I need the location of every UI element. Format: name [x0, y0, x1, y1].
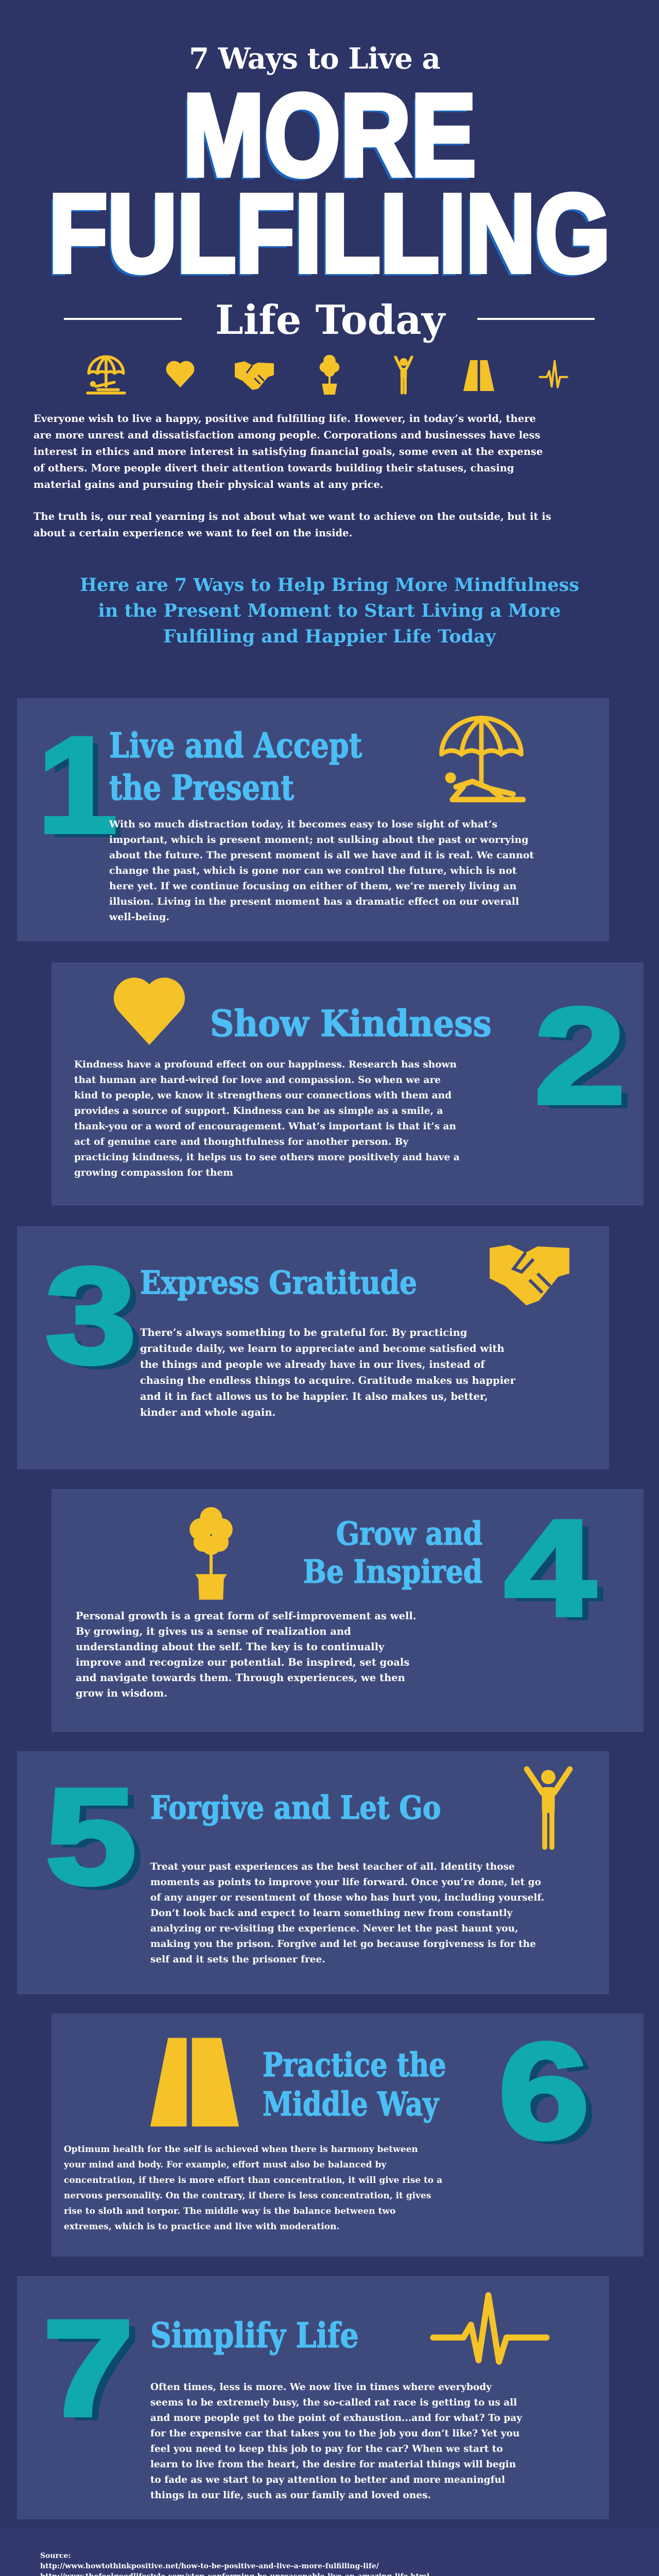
body text: With so much distraction today, it becomes easy to lose sight of what’s — [109, 819, 497, 830]
body text: understanding about the self. The key is to continually — [76, 1641, 384, 1653]
number 4: 4 — [505, 1492, 596, 1645]
body text: moments as points to improve your life forward. Once you’re done, let go — [150, 1877, 541, 1888]
number 1: 1 — [38, 709, 117, 861]
title: Life Today with lines: Life Today — [215, 297, 445, 344]
icon: umbrella — [86, 355, 126, 395]
intro text: of others. More people divert their attention towards building their statuses, chasing — [33, 462, 514, 474]
body text: There’s always something to be grateful for. By practicing — [140, 1327, 467, 1338]
heading: Be Inspired — [303, 1553, 482, 1590]
body text: kinder and whole again. — [140, 1406, 275, 1418]
panel: 2 Show Kindness — [51, 962, 644, 1206]
body text — [150, 1861, 544, 1965]
body text: Optimum health for the self is achieved when there is harmony between — [64, 2144, 418, 2155]
body text: here yet. If we continue focusing on either of them, we’re merely living an — [109, 880, 516, 892]
body text — [64, 2144, 442, 2232]
body text: illusion. Living in the present moment has a dramatic effect on our overall — [109, 896, 519, 907]
body text: grow in wisdom. — [76, 1687, 167, 1699]
body text: By growing, it gives us a sense of realization and — [76, 1625, 351, 1637]
body text: rise to sloth and torpor. The middle way is the balance between two — [64, 2206, 395, 2216]
icon: tree — [189, 1507, 233, 1600]
body text: seems to be extremely busy, the so-called rat race is getting to us all — [150, 2397, 517, 2408]
panel: 7 Simplify Life — [17, 2276, 609, 2519]
body text: that human are hard-wired for love and compassion. So when we are — [74, 1075, 441, 1086]
body text: things in our life, such as our family and loved ones. — [150, 2490, 431, 2501]
body text — [76, 1610, 417, 1699]
panel: 3 Express Gratitude — [17, 1226, 609, 1469]
body text: concentration, if there is more effort than concentration, it will give rise to a — [64, 2175, 442, 2185]
body text: for the expensive car that takes you to the job you don’t like? Yet you — [150, 2428, 519, 2439]
icon: pulse — [430, 2292, 550, 2365]
body text: act of genuine care and thoughtfulness for another person. By — [74, 1137, 408, 1147]
intro text — [33, 413, 543, 490]
number 5: 5 — [45, 1760, 136, 1913]
body text — [109, 819, 534, 923]
body text: self and it sets the prisoner free. — [150, 1954, 325, 1965]
body text: and it in fact allows us to be happier. It also makes us, better, — [140, 1391, 488, 1402]
body text: Don’t look back and expect to learn something new from constantly — [150, 1908, 512, 1919]
heading: Practice the — [263, 2046, 446, 2084]
icon: handshake — [490, 1245, 569, 1306]
heading — [109, 725, 362, 808]
heading — [303, 1515, 482, 1590]
panel: 4 Grow and Be Inspired — [51, 1489, 644, 1732]
intro text: material gains and pursuing their physical wants at any price. — [33, 479, 384, 490]
heading: Express Gratitude — [140, 1264, 417, 1301]
body text: the things and people we already have in our lives, instead of — [140, 1359, 485, 1370]
body text: improve and recognize our potential. Be inspired, set goals — [76, 1656, 409, 1668]
icon row — [86, 354, 568, 395]
body text: analyzing or re-visiting the experience. Never let the past haunt you, — [150, 1923, 518, 1934]
heading: the Present — [109, 768, 294, 808]
number 6: 6 — [498, 2015, 589, 2167]
body text: and navigate towards them. Through experiences, we then — [76, 1672, 405, 1684]
body text: feel you need to keep this job to pay for the car? When we start to — [150, 2444, 503, 2454]
body text: thank-you or a word of encouragement. What’s important is that it’s an — [74, 1121, 456, 1132]
body text: of any anger or resentment of those who has hurt you, including yourself. — [150, 1892, 544, 1903]
heading: Forgive and Let Go — [150, 1789, 441, 1826]
icon: pulse — [539, 360, 568, 388]
heading: Live and Accept — [109, 725, 362, 766]
icon: road — [463, 360, 494, 391]
body text: Kindness have a profound effect on our happiness. Research has shown — [74, 1059, 457, 1070]
title: Life Today with lines — [64, 297, 595, 344]
subheading: Here are 7 Ways to Help Bring More Mindfulness — [80, 574, 579, 596]
panel: 6 Practice the Middle Way — [51, 2013, 644, 2257]
number 2: 2 — [534, 980, 626, 1132]
body text: to fade as we start to pay attention to better and more meaningful — [150, 2475, 505, 2485]
body text: practicing kindness, it helps us to see others more positively and have a — [74, 1152, 460, 1163]
body text: growing compassion for them — [74, 1167, 233, 1178]
body text: extremes, which is to practice and live with moderation. — [64, 2222, 339, 2232]
heading: Grow and — [336, 1515, 482, 1552]
body text: your mind and body. For example, effort must also be balanced by — [64, 2160, 386, 2170]
body text: important, which is present moment; not sulking about the past or worrying — [109, 834, 529, 845]
icon: road — [150, 2038, 239, 2127]
body text: learn to live from the heart, the desire for material things will begin — [150, 2459, 516, 2470]
body text: Personal growth is a great form of self-improvement as well. — [76, 1610, 417, 1622]
body text: kind to people, we know it strengthens our connections with them and — [74, 1090, 452, 1101]
subheading — [80, 574, 579, 647]
number 3: 3 — [45, 1240, 136, 1392]
intro text 2: about a certain experience we want to feel on the inside. — [33, 527, 352, 539]
intro text: interest in ethics and more interest in satisfying financial goals, some even at the expense — [33, 446, 543, 457]
intro text: are more unrest and dissatisfaction among people. Corporations and businesses have less — [33, 429, 541, 441]
icon: umbrella — [439, 716, 526, 803]
body text: change the past, which is gone nor can we control the future, which is not — [109, 865, 517, 876]
body text — [74, 1059, 460, 1178]
intro text 2: The truth is, our real yearning is not about what we want to achieve on the outside, but it is — [33, 511, 551, 522]
heading — [263, 2046, 446, 2124]
subheading: Fulfilling and Happier Life Today — [163, 626, 496, 647]
title: 7 Ways to Live a: 7 Ways to Live a — [189, 42, 440, 76]
body text: making you the prison. Forgive and let go because forgiveness is for the — [150, 1939, 536, 1950]
body text: about the future. The present moment is all we have and it is real. We cannot — [109, 850, 534, 861]
number 7: 7 — [43, 2292, 134, 2445]
body text: Treat your past experiences as the best teacher of all. Identity those — [150, 1861, 515, 1872]
body text — [140, 1327, 516, 1418]
sources band — [0, 2528, 659, 2576]
sources text: Source: — [40, 2552, 71, 2560]
title: FULFILLING: FULFILLING — [49, 171, 610, 295]
icon: person — [394, 355, 413, 395]
body text: chasing the endless things to acquire. Gratitude makes us happier — [140, 1375, 515, 1386]
sources text: http://www.howtothinkpositive.net/how-to-be-positive-and-live-a-more-fulfilling-life/ — [40, 2562, 379, 2570]
intro text: Everyone wish to live a happy, positive and fulfilling life. However, in today’s world, there — [33, 413, 536, 425]
icon: tree — [319, 354, 340, 395]
panel: 1 Live and Accept the Present — [17, 698, 609, 941]
intro text 2 — [33, 511, 551, 539]
body text: gratitude daily, we learn to appreciate and become satisfied with — [140, 1343, 505, 1354]
body text: nervous personality. On the contrary, if there is less concentration, it gives — [64, 2191, 431, 2201]
heading: Simplify Life — [150, 2315, 359, 2355]
body text: and more people get to the point of exhaustion...and for what? To pay — [150, 2413, 522, 2424]
sources text — [40, 2552, 429, 2576]
icon: heart — [166, 361, 195, 387]
body text: Often times, less is more. We now live in times where everybody — [150, 2382, 492, 2393]
title: MORE: MORE — [183, 70, 476, 200]
heading: Show Kindness — [210, 1002, 492, 1045]
icon: person — [524, 1766, 573, 1850]
heading: Middle Way — [263, 2085, 439, 2124]
body text: well-being. — [109, 911, 169, 923]
body text: provides a source of support. Kindness can be as simple as a smile, a — [74, 1106, 443, 1116]
body text — [150, 2382, 522, 2501]
icon: handshake — [235, 361, 274, 390]
subheading: in the Present Moment to Start Living a More — [98, 600, 561, 621]
icon: heart — [113, 978, 185, 1045]
panel: 5 Forgive and Let Go — [17, 1751, 609, 1994]
